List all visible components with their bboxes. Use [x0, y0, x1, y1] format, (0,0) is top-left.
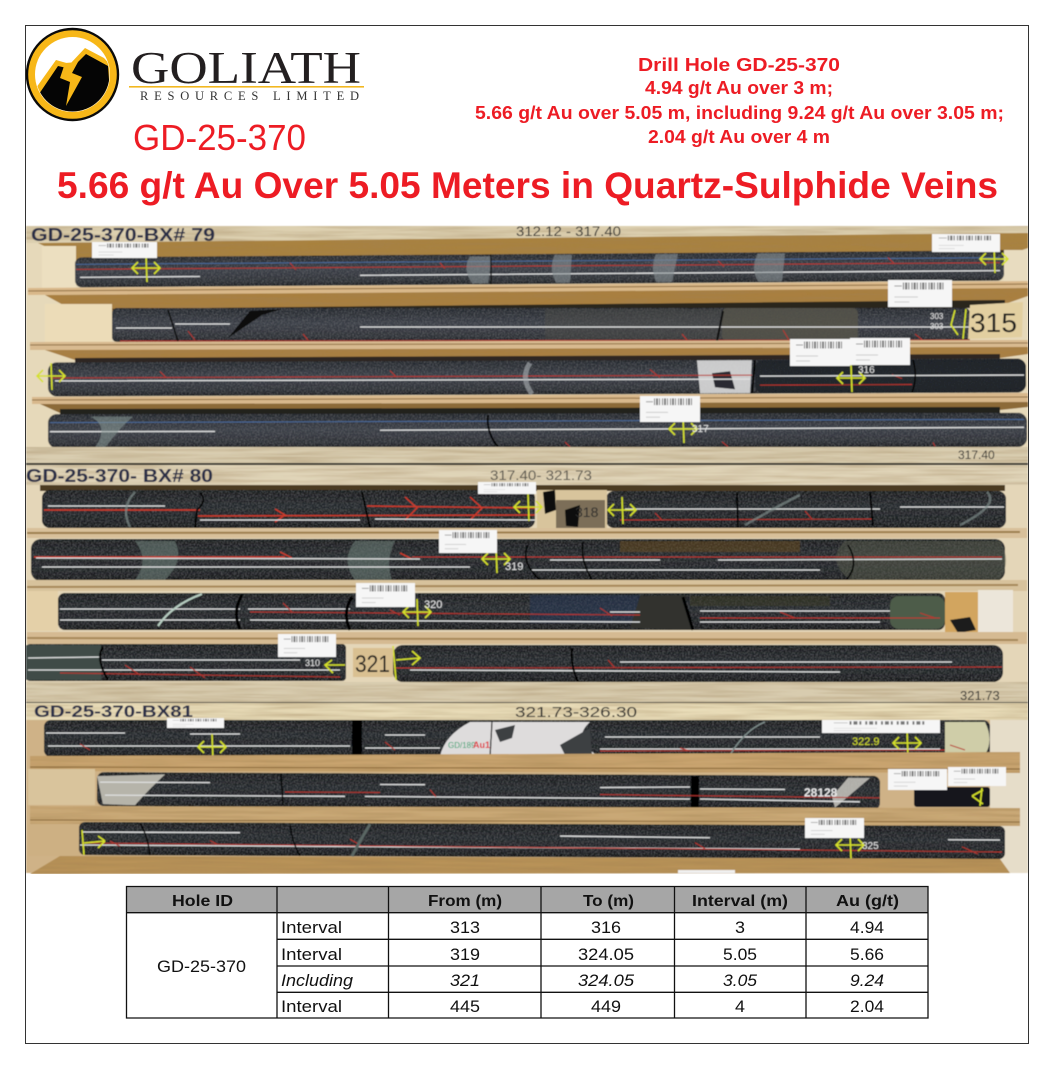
core box 80: 320 — [424, 599, 442, 611]
divider — [32, 393, 1028, 404]
logo rule — [129, 86, 364, 88]
core box 81 — [26, 702, 1028, 874]
core box 80: 317.40- 321.73 — [490, 467, 592, 483]
table header: Au (g/t) — [836, 893, 899, 910]
core row 1 — [75, 251, 1004, 287]
row 4: 445 — [450, 997, 480, 1016]
core box 80 — [26, 463, 1028, 703]
table header: From (m) — [428, 893, 502, 910]
divider — [27, 632, 1027, 644]
row 3: including: 324.05 — [578, 971, 635, 990]
bottom shelf — [30, 856, 1010, 874]
row 3: including: 9.24 — [850, 971, 884, 990]
divider — [30, 806, 1020, 826]
row 4 — [281, 997, 884, 1016]
core row 1: GD/189 — [448, 741, 476, 750]
sample labels — [92, 234, 1000, 422]
row 2: 319 — [450, 945, 480, 964]
core box 79: 316 — [858, 365, 875, 376]
table grid — [126, 886, 928, 1018]
row 1: 4.94 — [850, 918, 884, 937]
divider — [27, 528, 1027, 538]
row 2: 324.05 — [578, 945, 634, 964]
icon: mountain and lightning emblem — [27, 29, 118, 125]
divider — [27, 580, 1027, 591]
drill hole summary: 5.66 g/t Au over 5.05 m, including 9.24 g/t Au over 3.05 m; — [475, 103, 1004, 123]
core row 3 — [48, 359, 1026, 396]
core box 81: 325 — [862, 841, 879, 852]
row 2: 5.66 — [850, 945, 884, 964]
row 4: 4 — [735, 997, 745, 1016]
sample labels — [167, 718, 1006, 838]
hole id heading: GD-25-370 — [133, 117, 306, 158]
row 3: including — [281, 971, 884, 990]
logo: Goliath Resources — [27, 29, 364, 125]
core row 2: 303 — [930, 322, 944, 331]
core row 3 — [58, 593, 976, 633]
table header — [126, 886, 928, 912]
divider — [30, 340, 1028, 350]
tag 321: 321 — [355, 651, 390, 678]
core row 2 — [31, 539, 1006, 581]
sample labels — [278, 482, 536, 657]
core box 79: 312.12 - 317.40 — [516, 223, 621, 239]
row 4: 2.04 — [850, 997, 884, 1016]
bottom lip — [26, 682, 1028, 703]
row 1: 313 — [450, 918, 480, 937]
core box 79: GD-25-370-BX# 79 — [31, 225, 215, 245]
core box 79: 317 — [692, 424, 709, 435]
core box 81: GD-25-370-BX81 — [34, 702, 193, 721]
row 4: 449 — [591, 997, 621, 1016]
tag 315: 315 — [970, 308, 1017, 338]
core box 80: GD-25-370- BX# 80 — [26, 466, 213, 486]
assay results table — [126, 886, 928, 1018]
core row 4 — [26, 644, 1003, 682]
table header: To (m) — [583, 893, 634, 910]
core box 80: 321.73 — [960, 688, 1000, 703]
main title: 5.66 g/t Au Over 5.05 Meters in Quartz-Sulphide Veins — [57, 164, 998, 206]
core box 80: 319 — [505, 561, 523, 573]
wordmark: GOLIATH — [131, 43, 361, 93]
row 1: 3 — [735, 918, 745, 937]
core box 79 — [26, 223, 1028, 463]
core row 1 — [42, 490, 1006, 528]
drill hole summary: 4.94 g/t Au over 3 m; — [645, 78, 833, 98]
tagline: RESOURCES LIMITED — [140, 89, 359, 103]
drill hole summary: 2.04 g/t Au over 4 m — [648, 127, 830, 147]
core row 2: 28128 — [804, 786, 838, 800]
row 1: Interval — [281, 918, 342, 937]
row 3: including: 3.05 — [723, 971, 758, 990]
core row 4 — [48, 413, 1027, 448]
divider — [30, 752, 1020, 773]
core photo — [26, 223, 1028, 874]
core row 1: Au1 — [473, 740, 490, 750]
row 3: including: Including — [281, 971, 354, 990]
drill hole summary — [475, 55, 1004, 147]
tag 315 — [968, 302, 1023, 339]
table header: Interval (m) — [692, 893, 788, 910]
core row 1: 322.9 — [852, 736, 880, 748]
hole id cell: GD-25-370 — [157, 957, 246, 976]
core row 1 — [44, 720, 990, 757]
core row 2: 303 — [930, 312, 944, 321]
core row 3 — [79, 822, 1005, 859]
core box 79: 317.40 — [958, 448, 995, 462]
row 1: 316 — [591, 918, 621, 937]
row 2: Interval — [281, 945, 342, 964]
divider — [28, 281, 1028, 295]
core row 2 — [97, 772, 880, 810]
row 2: 5.05 — [723, 945, 757, 964]
core row 2 — [112, 308, 970, 342]
header — [27, 29, 1004, 206]
row 2 — [281, 945, 884, 964]
row 1 — [281, 918, 884, 937]
core row 4: 310 — [305, 658, 320, 668]
core box 81: 321.73-326.30 — [515, 704, 637, 721]
core fragment — [914, 787, 990, 807]
row 3: including: 321 — [450, 971, 480, 990]
row 4: Interval — [281, 997, 342, 1016]
bottom lip — [26, 447, 1028, 463]
core row 1: 318 — [575, 504, 599, 520]
drill hole summary: Drill Hole GD-25-370 — [638, 55, 840, 75]
table header: Hole ID — [172, 893, 233, 910]
